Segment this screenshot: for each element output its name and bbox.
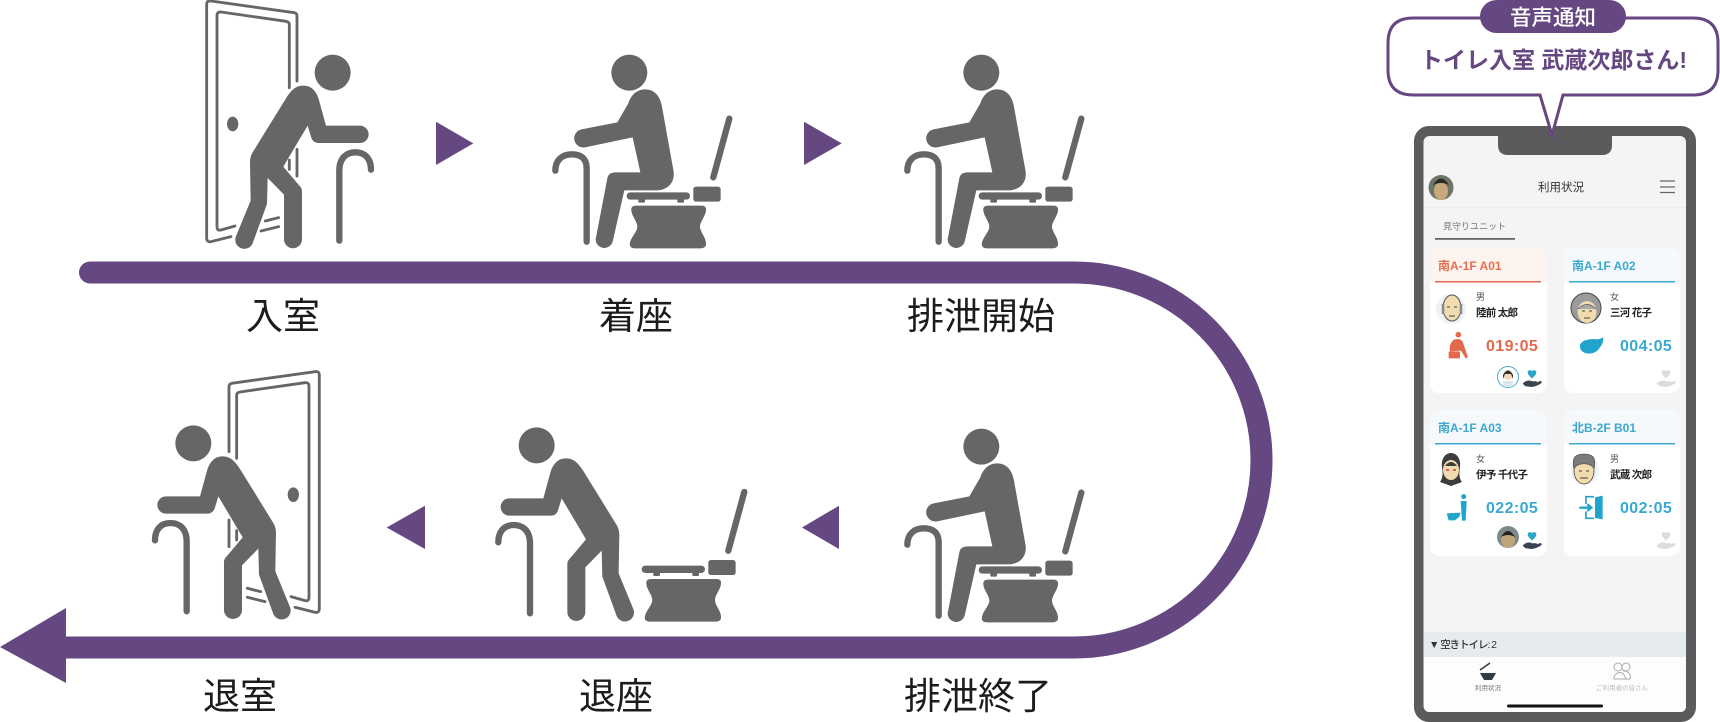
card: A01: 男 xyxy=(1476,292,1485,302)
arrow: entry to seated xyxy=(436,122,473,165)
tab: usage status: 利用状況 xyxy=(1475,683,1502,692)
arrow: seated to excretion start xyxy=(804,122,842,165)
tab: watch unit xyxy=(1435,222,1515,240)
tab: usage status xyxy=(1475,663,1502,692)
card: A03: 022:05 xyxy=(1486,500,1538,517)
tab: watch unit: 見守りユニット xyxy=(1443,222,1506,232)
card: A01: 南A-1F A01 xyxy=(1438,259,1502,273)
status bar: vacant toilets xyxy=(1424,632,1686,657)
icon: person leaving through door xyxy=(155,372,319,620)
card: B01: 002:05 xyxy=(1620,500,1672,517)
icon: excretion status xyxy=(1580,337,1603,353)
avatar: man xyxy=(1571,454,1599,484)
card: B01: 男 xyxy=(1610,454,1619,464)
app header: 利用状況 xyxy=(1538,180,1584,194)
card: B01 xyxy=(1564,410,1680,556)
phone screen xyxy=(1424,136,1686,712)
card: B01: 武蔵 次郎 xyxy=(1610,468,1652,481)
icon: person seated at excretion end xyxy=(907,429,1081,622)
callout: voice notification xyxy=(1388,0,1718,135)
card: A03 xyxy=(1430,410,1547,556)
pill: voice notification heading xyxy=(1480,0,1626,33)
phone notch xyxy=(1498,130,1612,155)
label: leaving: 退室 xyxy=(203,676,277,717)
card: A01 xyxy=(1430,248,1547,393)
icon: care hand inactive xyxy=(1657,532,1676,549)
notification message: トイレ入室 武蔵次郎さん! xyxy=(1420,47,1687,73)
icon: care hand inactive xyxy=(1657,370,1676,387)
card: A03: 女 xyxy=(1476,453,1485,464)
avatar: elderly woman xyxy=(1571,293,1601,323)
card: A02: 三河 花子 xyxy=(1610,306,1652,319)
icon: person seated at excretion start xyxy=(907,55,1081,248)
card: B01: 北B-2F B01 xyxy=(1572,421,1636,435)
icon: person entering through door xyxy=(207,1,371,249)
flow line arrow xyxy=(0,272,1262,683)
card: A02: 女 xyxy=(1610,291,1619,302)
icon: person standing up from toilet xyxy=(498,427,744,622)
icon: staff avatar xyxy=(1498,366,1518,388)
tab: users xyxy=(1596,663,1648,692)
icon: staff avatar xyxy=(1497,526,1519,548)
tab: users: ご利用者の皆さん xyxy=(1596,683,1648,692)
app header xyxy=(1424,175,1686,208)
icon: care hand xyxy=(1523,370,1542,387)
tab bar xyxy=(1424,657,1686,712)
arrow: excretion end to standing xyxy=(802,506,839,549)
card: A03: 伊予 千代子 xyxy=(1476,468,1528,481)
panel: smartphone app xyxy=(1414,126,1696,722)
icon: care hand xyxy=(1523,532,1542,549)
home indicator xyxy=(1507,704,1603,708)
icon: seated status xyxy=(1449,332,1468,358)
card: A02 xyxy=(1564,248,1680,393)
label: sitting: 着座 xyxy=(599,296,673,337)
label: standing up: 退座 xyxy=(579,676,653,717)
icon: entering status xyxy=(1579,496,1603,519)
phone frame xyxy=(1414,126,1696,722)
pill: voice notification heading: 音声通知 xyxy=(1510,6,1596,30)
label: excretion start: 排泄開始 xyxy=(907,296,1055,337)
label: excretion end: 排泄終了 xyxy=(904,676,1052,717)
card: A02: 南A-1F A02 xyxy=(1572,259,1636,273)
label: entering: 入室 xyxy=(246,296,320,337)
card: A02: 004:05 xyxy=(1620,338,1672,355)
arrow: standing to leaving xyxy=(387,506,425,549)
card: A03: 南A-1F A03 xyxy=(1438,421,1502,435)
icon: standing status xyxy=(1447,494,1467,521)
card: A01: 陸前 太郎 xyxy=(1476,306,1518,319)
avatar: woman with glasses xyxy=(1440,453,1462,486)
avatar: elderly man xyxy=(1436,294,1466,324)
icon: person seated on toilet xyxy=(555,55,729,248)
card: A01: 019:05 xyxy=(1486,338,1538,355)
status bar: vacant toilets: ▼ 空きトイレ: 2 xyxy=(1429,638,1497,651)
